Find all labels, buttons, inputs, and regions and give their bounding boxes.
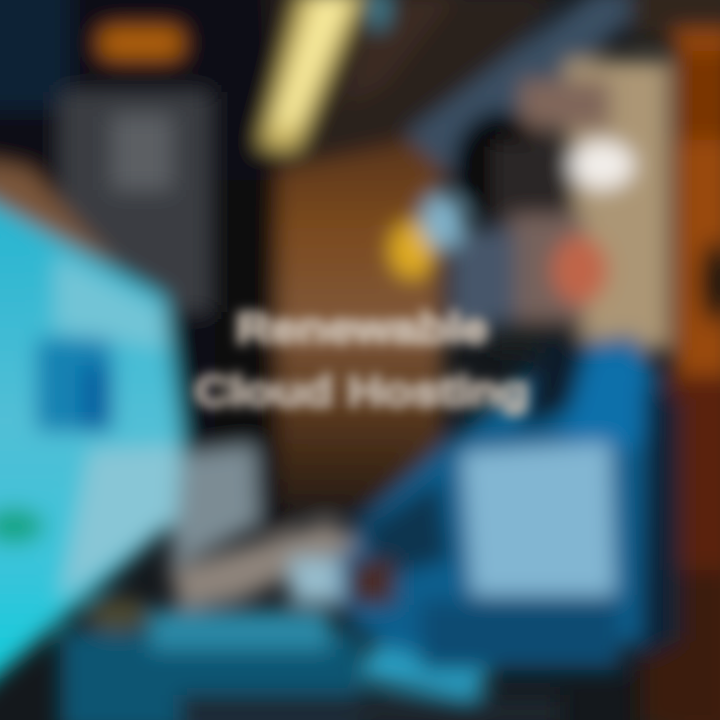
person: forearm and hand [170, 520, 360, 610]
screen darker bar [82, 365, 112, 430]
person: light apron panel [462, 442, 615, 595]
title line 2: Cloud Hosting [194, 367, 530, 416]
ceiling light tube [260, 0, 364, 150]
brown edge above screen [0, 160, 120, 270]
title, blurred [194, 304, 530, 416]
person: dark hair and head [450, 111, 608, 350]
screen lower-right light area [60, 445, 180, 600]
orange ceiling sign [100, 28, 182, 58]
beige wall [520, 60, 670, 350]
person: blue shirt [330, 335, 680, 680]
icon: wall object at right edge [700, 240, 720, 324]
title line 1: Renewable [236, 304, 488, 353]
yellow lamp [390, 222, 434, 278]
ceiling beam [345, 0, 720, 185]
bottom desk and keyboard [60, 558, 620, 720]
chalkboard menu [60, 92, 210, 312]
screen upper light area [55, 255, 168, 350]
wood panel centre [270, 0, 560, 510]
pale blue shape behind person [421, 194, 465, 250]
laptop screen [0, 190, 182, 700]
tablet and papers on desk [170, 445, 258, 570]
screen body [0, 190, 182, 700]
white cap highlight [570, 141, 634, 189]
screen green marker [0, 508, 44, 544]
dark ceiling and left wall [0, 0, 290, 530]
screen dark blue chart block [36, 338, 112, 432]
orange right wall [640, 30, 720, 720]
teal ceiling highlight [367, 0, 389, 30]
